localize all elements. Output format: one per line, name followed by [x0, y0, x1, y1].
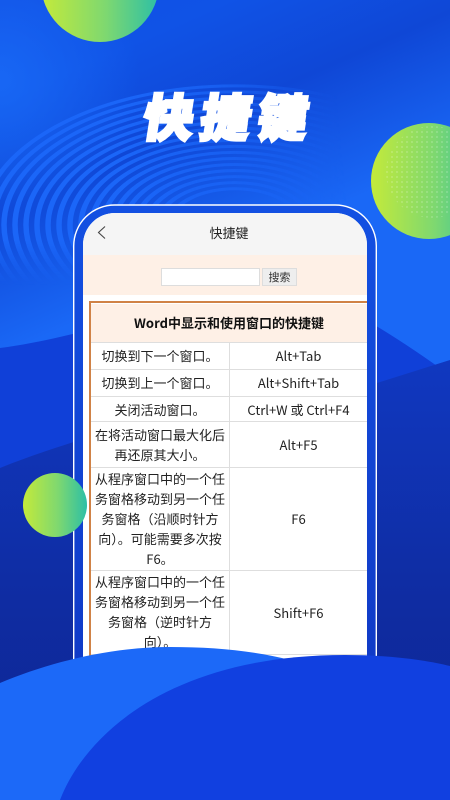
- table: 务窗格移动到另一个任: [95, 489, 225, 508]
- table: F6: [291, 509, 306, 528]
- table: 切换到上一个窗口。: [101, 373, 218, 392]
- search band: [83, 255, 367, 295]
- phone screen: [83, 213, 367, 713]
- row 5: [95, 469, 306, 568]
- row 3: [114, 400, 350, 418]
- table: 务窗格移动到另一个任: [95, 592, 225, 610]
- table: Alt+F5: [279, 434, 318, 454]
- table: 关闭活动窗口。: [114, 400, 206, 418]
- row 2: [101, 373, 339, 392]
- table: 从程序窗口中的一个任: [95, 572, 225, 590]
- table: 切换到下一个窗口。: [101, 346, 218, 365]
- table header: Word中显示和使用窗口的快捷键: [134, 313, 324, 332]
- table: Shift+F6: [274, 602, 323, 622]
- row 1: [101, 346, 321, 365]
- row 4: [95, 424, 318, 464]
- row 6: [95, 572, 323, 650]
- table: Alt+Tab: [276, 346, 321, 365]
- search button: [262, 268, 297, 286]
- title: 快捷键: [139, 79, 321, 151]
- search button: 搜索: [268, 269, 290, 285]
- table: 从程序窗口中的一个任: [95, 469, 225, 488]
- table: F6。: [146, 549, 174, 568]
- table: 再还原其大小。: [114, 444, 206, 464]
- table border: [89, 301, 367, 701]
- app bar: [83, 213, 367, 255]
- table: 务窗格（沿顺时针方: [101, 509, 218, 528]
- table header: [91, 304, 367, 342]
- table: 在将活动窗口最大化后: [95, 424, 225, 444]
- table: 向）。可能需要多次按: [98, 529, 222, 548]
- table: Ctrl+W 或 Ctrl+F4: [247, 400, 350, 418]
- search input: [161, 268, 260, 286]
- table: 向）。: [144, 632, 176, 650]
- table: 务窗格（逆时针方: [108, 612, 212, 630]
- table: Alt+Shift+Tab: [258, 373, 339, 392]
- screen title: 快捷键: [209, 223, 248, 242]
